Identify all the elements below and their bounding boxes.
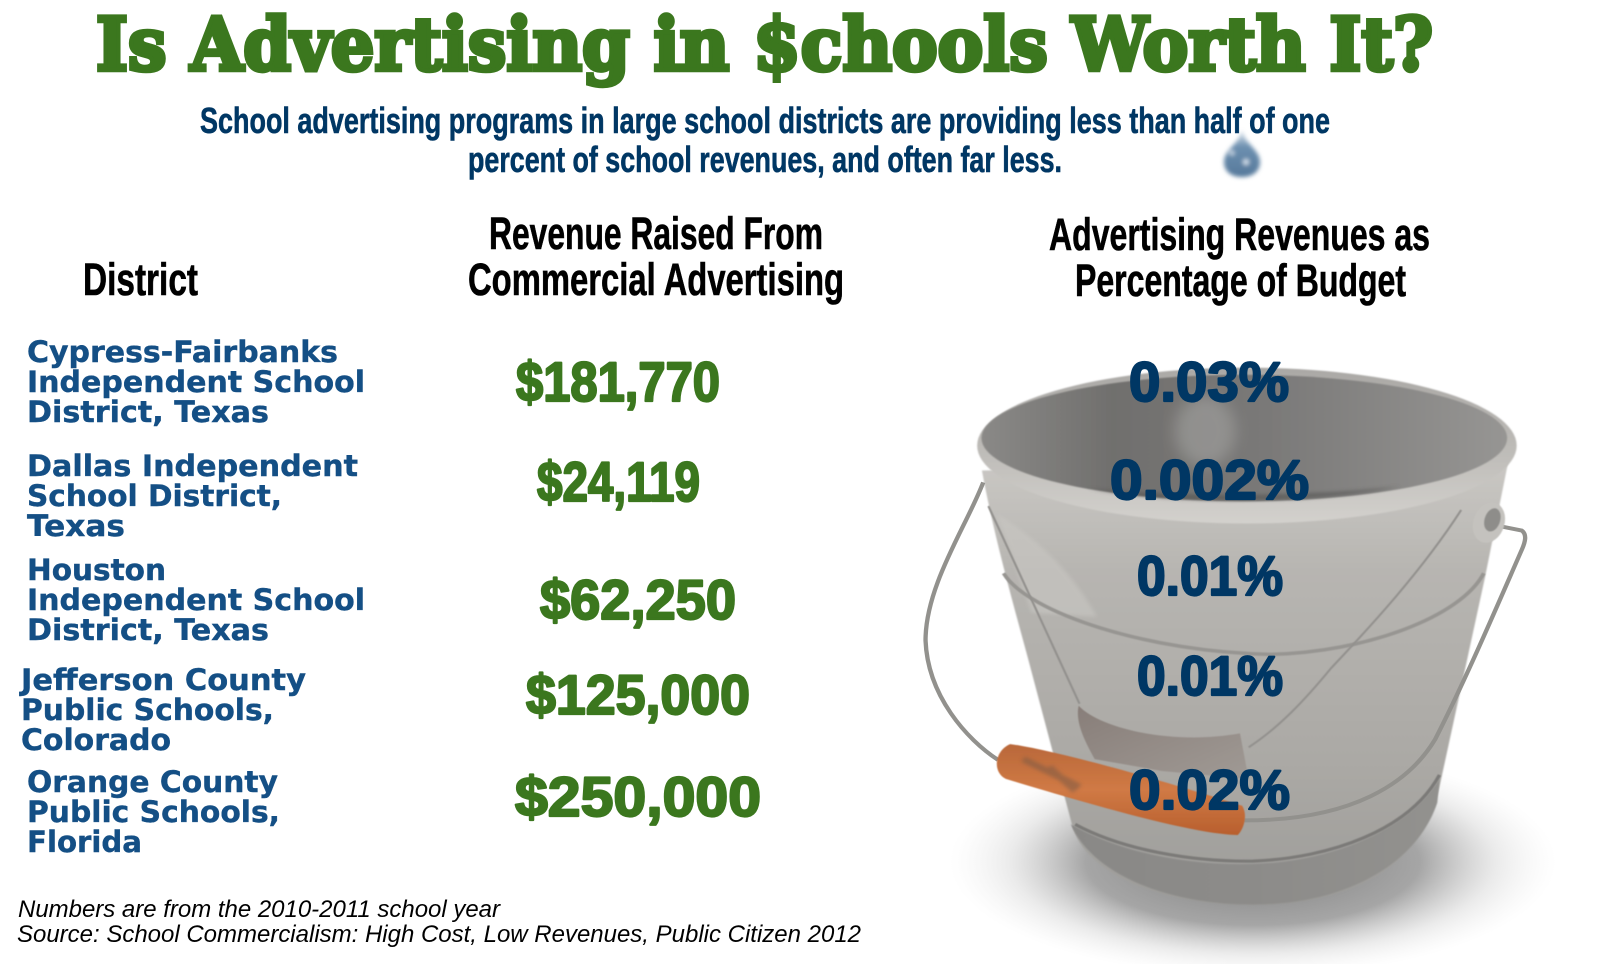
column heading: percentage: Advertising Revenues as	[1049, 209, 1430, 260]
revenue values: $250,000	[515, 765, 761, 828]
left body highlight	[997, 514, 1097, 617]
district: Houston: Independent School	[27, 583, 365, 617]
subtitle: percent of school revenues, and often far less.	[468, 139, 1062, 180]
column heading: percentage	[1049, 209, 1430, 306]
title: Is Advertising in $chools Worth It?	[96, 2, 1433, 88]
bucket ground shadow	[949, 747, 1557, 964]
faint inner wire	[988, 506, 1461, 747]
revenue values: $62,250	[540, 568, 736, 631]
bucket body	[982, 459, 1509, 905]
district: Orange County: Public Schools,	[27, 795, 280, 829]
revenue values: $125,000	[526, 663, 750, 726]
bucket foot	[1071, 779, 1439, 905]
district: Houston: District, Texas	[27, 613, 269, 647]
wood texture	[1023, 759, 1080, 791]
percentage values: 0.01%	[1137, 644, 1283, 707]
source note: Source: School Commercialism: High Cost, Low Revenues, Public Citizen 2012	[17, 921, 861, 948]
district: Dallas	[27, 449, 358, 543]
bucket inside	[981, 375, 1507, 501]
inside shadow bottom	[1088, 486, 1400, 501]
source note	[17, 896, 861, 948]
column heading: revenue: Revenue Raised From	[489, 208, 823, 259]
district: Cypress-Fairbanks	[27, 335, 365, 429]
district: Orange County	[27, 765, 280, 859]
percentage values: 0.002%	[1110, 448, 1309, 511]
wooden handle grip	[997, 744, 1245, 835]
percentage values: 0.03%	[1129, 350, 1289, 413]
inside highlight	[1175, 395, 1236, 467]
district: Houston	[27, 553, 365, 647]
percentage values: 0.01%	[1137, 544, 1283, 607]
revenue values: $181,770	[516, 350, 720, 413]
source note: Numbers are from the 2010-2011 school year	[18, 896, 501, 923]
district: Orange County: Orange County	[27, 765, 278, 799]
handle lug	[1468, 499, 1510, 546]
bucket lower rib	[1075, 775, 1439, 861]
column heading: percentage: Percentage of Budget	[1075, 255, 1406, 306]
bucket illustration	[926, 368, 1557, 964]
district: Dallas: School District,	[27, 479, 282, 513]
district: Dallas: Texas	[27, 509, 125, 543]
percentage values: 0.02%	[1129, 758, 1290, 821]
district: Orange County: Florida	[27, 825, 142, 859]
district: Houston: Houston	[27, 553, 166, 587]
icon: water drop	[1224, 130, 1260, 177]
district: Jefferson County: Public Schools,	[21, 693, 274, 727]
left handle wire	[926, 482, 998, 760]
district: Jefferson County: Colorado	[21, 723, 171, 757]
subtitle	[200, 100, 1330, 180]
bucket ribs	[1004, 573, 1484, 654]
district: Cypress-Fairbanks: Independent School	[27, 365, 365, 399]
right handle wire	[1244, 526, 1525, 820]
column heading: revenue: Commercial Advertising	[468, 254, 844, 305]
district: Dallas: Dallas Independent	[27, 449, 358, 483]
district: Jefferson County: Jefferson County	[19, 663, 306, 697]
percentage values	[1110, 350, 1309, 821]
column heading: district: District	[83, 254, 198, 305]
district: Jefferson County	[19, 663, 306, 757]
dark patch	[1078, 706, 1249, 779]
district: Cypress-Fairbanks: Cypress-Fairbanks	[27, 335, 338, 369]
revenue values	[515, 350, 761, 828]
bucket rim	[977, 368, 1517, 523]
revenue values: $24,119	[537, 450, 700, 513]
district: Cypress-Fairbanks: District, Texas	[27, 395, 269, 429]
column heading: revenue	[468, 208, 844, 305]
